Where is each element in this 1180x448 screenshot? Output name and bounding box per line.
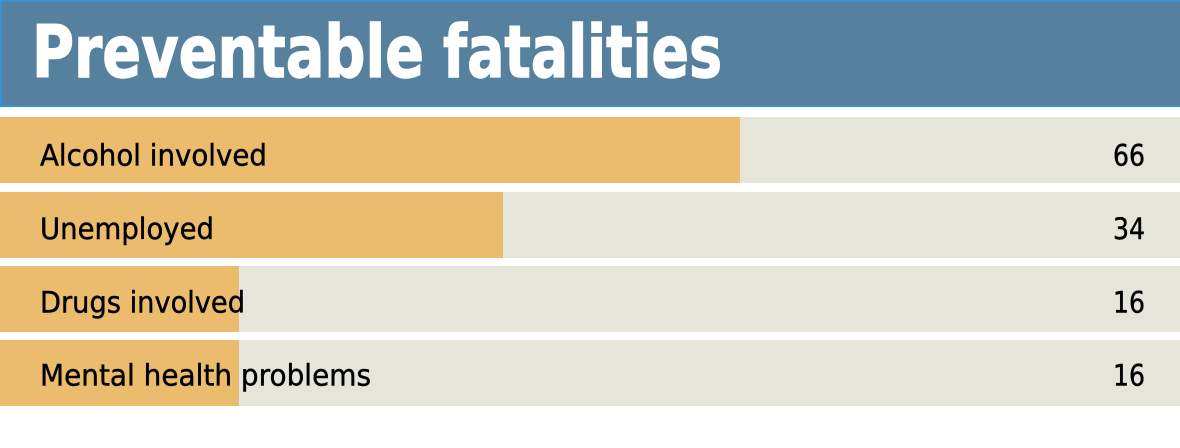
- row: Unemployed, 34: Unemployed: [40, 212, 214, 246]
- title: Preventable: [32, 10, 424, 94]
- row: Mental health problems, 16: Mental health problems: [40, 358, 371, 392]
- title: fatalities: [443, 10, 722, 94]
- row: Mental health problems, 16: 16: [1113, 358, 1145, 392]
- row: Alcohol involved, 66: 66: [1113, 138, 1145, 172]
- row: Drugs involved, 16: 16: [1113, 286, 1145, 320]
- header panel: [0, 0, 1180, 107]
- row: Alcohol involved, 66: Alcohol involved: [40, 138, 267, 172]
- row: Mental health problems, 16: [0, 340, 1180, 406]
- row: Drugs involved, 16: [0, 266, 1180, 332]
- row: Unemployed, 34: 34: [1113, 212, 1145, 246]
- row: Alcohol involved, 66: [0, 117, 1180, 183]
- row: Unemployed, 34: [0, 192, 1180, 258]
- row: Drugs involved, 16: Drugs involved: [40, 286, 245, 320]
